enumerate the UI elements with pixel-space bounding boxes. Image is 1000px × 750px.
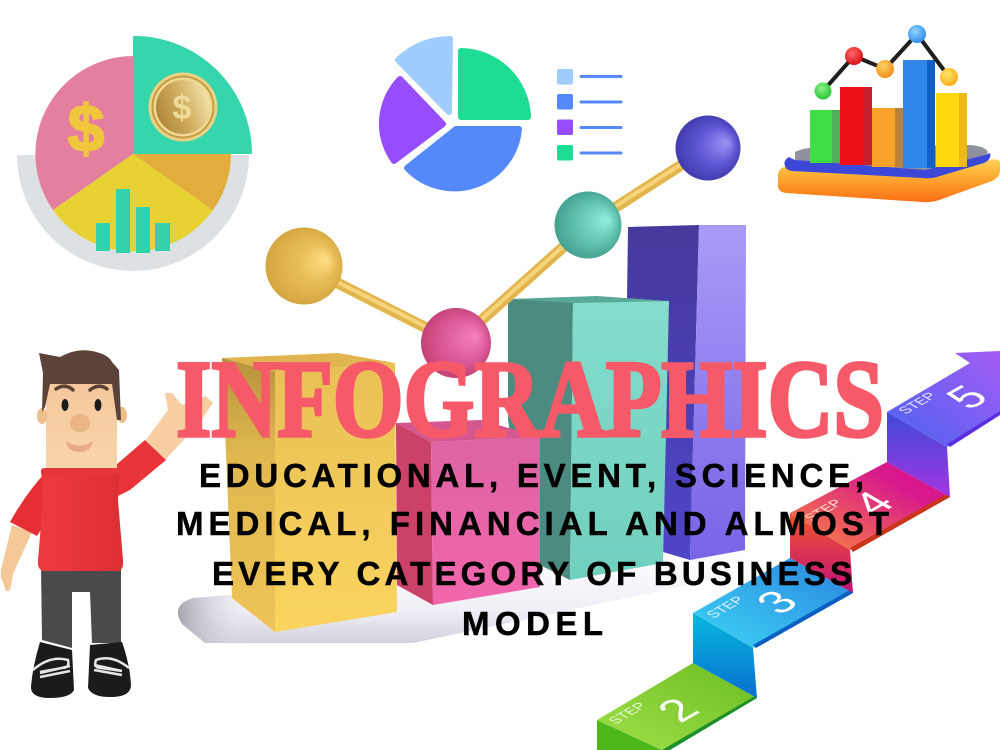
central 3D bar chart (178, 116, 746, 643)
step 2: 2 (647, 692, 710, 729)
purple slice (382, 79, 443, 161)
grey ring (17, 155, 249, 271)
subtitle (176, 457, 889, 642)
platform (178, 550, 745, 643)
step 5 arrow: STEP (894, 390, 940, 416)
step 4 (790, 462, 950, 593)
green slice (134, 37, 251, 153)
nose (70, 414, 90, 432)
pink sphere (421, 308, 491, 378)
pink bar (396, 420, 540, 605)
legend (557, 69, 621, 160)
left sleeve (10, 474, 50, 536)
gold coin (148, 72, 218, 142)
grey top (795, 145, 988, 172)
3D colourful bar chart icon (778, 25, 1000, 202)
indigo bar (627, 225, 746, 560)
subtitle: EDUCATIONAL, EVENT, SCIENCE, (199, 457, 864, 494)
gold bar (222, 353, 397, 632)
raised arm and hand (146, 393, 213, 460)
marker dots (814, 25, 958, 100)
money pie chart icon (17, 37, 251, 271)
step 3: 3 (746, 584, 809, 621)
gold sphere (266, 228, 342, 304)
ears (37, 407, 127, 424)
subtitle: EVERY CATEGORY OF BUSINESS (212, 555, 852, 592)
shoelaces (33, 658, 129, 677)
raised sleeve (116, 440, 166, 496)
head (46, 376, 117, 475)
mini bars (96, 189, 170, 253)
orange slice (133, 154, 231, 210)
blue slice (407, 129, 519, 188)
collar (41, 468, 119, 475)
subtitle: MODEL (462, 605, 603, 642)
right shoe (88, 642, 131, 697)
flat pie chart with legend (382, 39, 621, 188)
light blue slice (398, 39, 450, 112)
connecting rods (304, 147, 708, 343)
mouth (66, 441, 93, 452)
hair (39, 350, 121, 420)
subtitle: MEDICAL, FINANCIAL AND ALMOST (176, 505, 889, 542)
green slice (461, 51, 528, 117)
step 2: STEP (604, 700, 650, 726)
bars (810, 60, 967, 168)
pants (41, 565, 121, 648)
step 2 (597, 663, 757, 750)
pink slice (35, 56, 133, 210)
isometric step staircase (597, 351, 1000, 750)
shirt (38, 470, 123, 571)
step 5 arrow (887, 351, 1000, 497)
cartoon man character (1, 350, 213, 698)
left arm (1, 525, 32, 591)
eyebrows (56, 386, 107, 390)
dollar sign: $ (68, 91, 104, 165)
yellow slice (53, 154, 213, 251)
teal sphere (554, 192, 622, 258)
step 3 (693, 558, 853, 698)
step 4: STEP (800, 497, 846, 523)
step 4: 4 (842, 485, 905, 522)
line connectors (823, 34, 949, 91)
blue layer (784, 153, 990, 178)
orange base (778, 159, 1000, 202)
indigo sphere (676, 116, 740, 180)
teal bar (508, 296, 669, 580)
gold coin: $ (173, 89, 192, 127)
step 3: STEP (702, 594, 748, 620)
step 5 arrow: 5 (936, 379, 999, 416)
eyes (62, 399, 102, 411)
left shoe (31, 642, 74, 698)
